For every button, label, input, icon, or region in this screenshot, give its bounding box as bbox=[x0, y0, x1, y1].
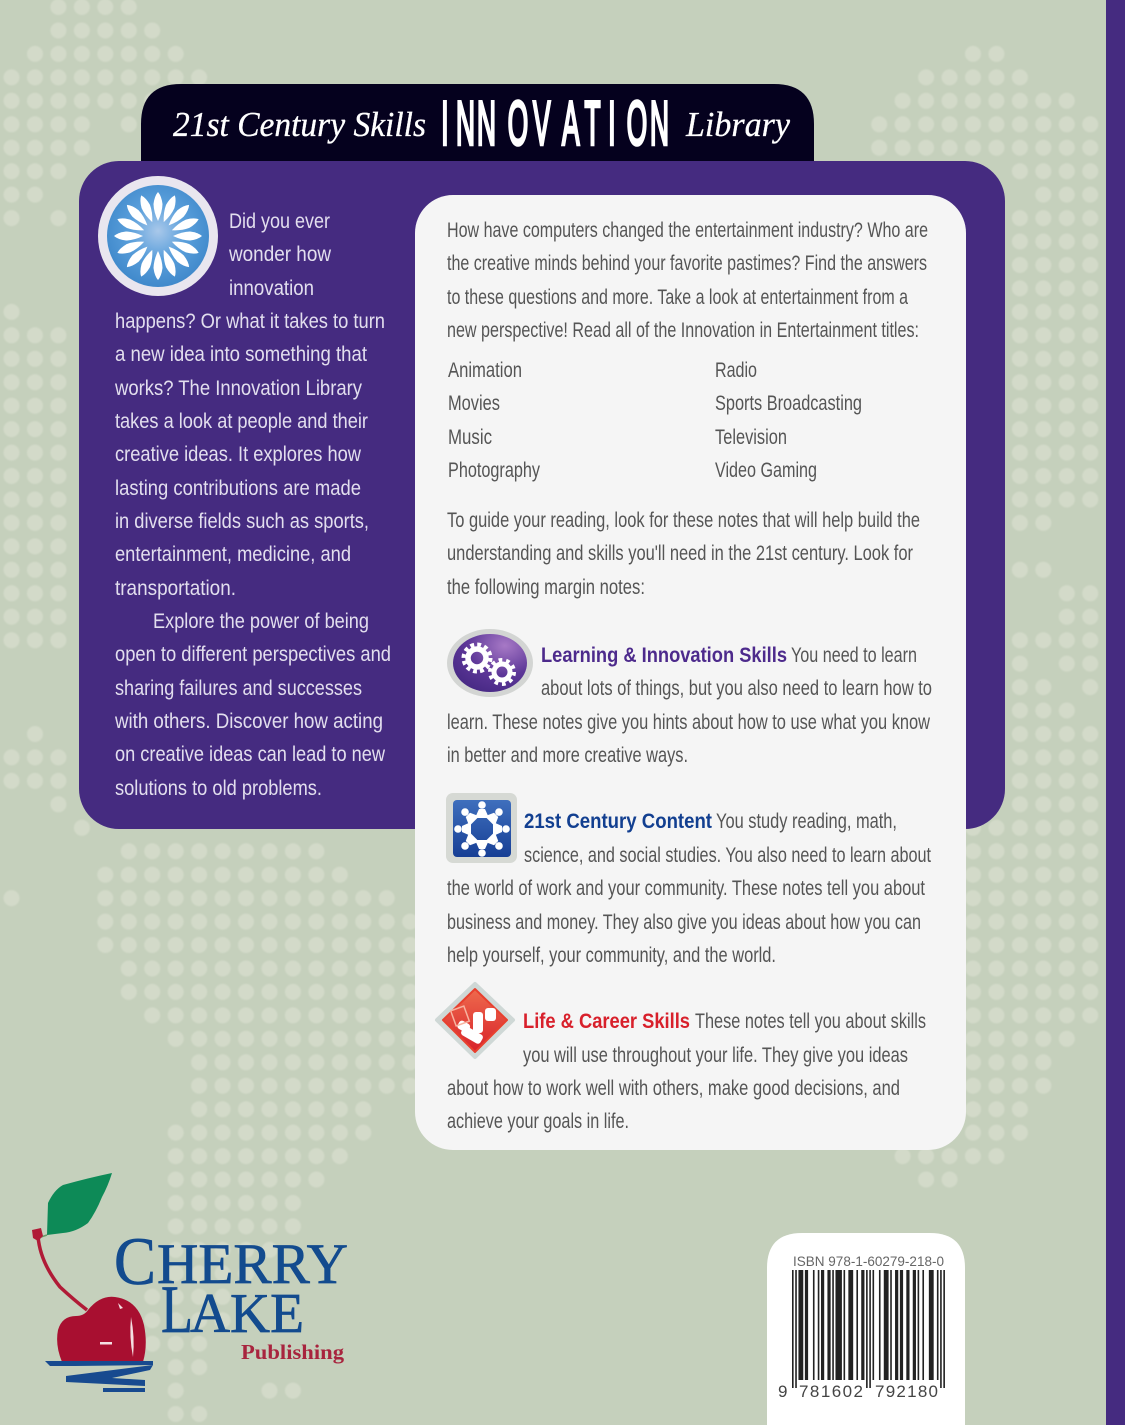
text: learning and innovation skills bbox=[447, 644, 932, 767]
text: learning and innovation skills: learn. These notes give you hints about how to use what you know bbox=[447, 711, 931, 734]
text: introduction paragraphs: wonder how bbox=[228, 243, 332, 266]
text: introduction paragraphs: lasting contributions are made bbox=[115, 477, 361, 500]
text: introduction paragraphs: with others. Discover how acting bbox=[114, 710, 383, 733]
text: 21st century content bbox=[447, 810, 931, 967]
text: 21st century content: 21st Century Content bbox=[524, 810, 712, 833]
logo wordmark bbox=[114, 1223, 348, 1364]
text: introduction paragraphs: solutions to old problems. bbox=[115, 777, 322, 800]
text: introduction paragraphs: works? The Innovation Library bbox=[114, 377, 362, 400]
text: 21st century content: help yourself, your community, and the world. bbox=[447, 944, 776, 967]
title banner: INNOVATION bbox=[441, 90, 669, 159]
text: learning and innovation skills: You need to learn bbox=[791, 644, 917, 667]
list: entertainment titles: Music bbox=[448, 426, 492, 449]
text: introduction paragraphs: sharing failures and successes bbox=[115, 677, 362, 700]
text: reading guide: understanding and skills you'll need in the 21st century. Look for bbox=[447, 542, 913, 565]
text: intro paragraph: new perspective! Read all of the Innovation in Entertainment titles: bbox=[447, 319, 919, 342]
text: introduction paragraphs: a new idea into something that bbox=[115, 343, 367, 366]
text: 21st century content: the world of work and your community. These notes tell you about bbox=[447, 877, 925, 900]
list: entertainment titles: Video Gaming bbox=[715, 459, 817, 482]
text: introduction paragraphs: Explore the power of being bbox=[153, 610, 369, 633]
text: 21st century content: science, and social studies. You also need to learn about bbox=[524, 844, 931, 867]
text: introduction paragraphs: happens? Or what it takes to turn bbox=[115, 310, 385, 333]
icon: cherry with leaf bbox=[32, 1173, 153, 1392]
text: life and career skills: Life & Career Skills bbox=[523, 1010, 690, 1033]
text: reading guide bbox=[447, 509, 920, 599]
text: life and career skills: achieve your goals in life. bbox=[447, 1110, 629, 1133]
text: reading guide: the following margin notes: bbox=[447, 576, 645, 599]
barcode digits: 781602 bbox=[799, 1382, 863, 1401]
logo: Cherry Lake Publishing bbox=[32, 1173, 348, 1392]
list: entertainment titles: Movies bbox=[448, 392, 500, 415]
icon: red diamond with hands bbox=[437, 984, 513, 1057]
text: introduction paragraphs: on creative ideas can lead to new bbox=[115, 743, 386, 766]
icon: circle of people bbox=[446, 793, 517, 863]
text: introduction paragraphs: creative ideas. It explores how bbox=[115, 443, 362, 466]
text: introduction paragraphs: open to different perspectives and bbox=[115, 643, 391, 666]
barcode bars bbox=[792, 1270, 945, 1388]
text: life and career skills: you will use throughout your life. They give you ideas bbox=[523, 1044, 908, 1067]
text: intro paragraph: How have computers changed the entertainment industry? Who are bbox=[447, 219, 928, 242]
text: 21st century content: You study reading, math, bbox=[716, 810, 897, 833]
logo wordmark: HERRY bbox=[157, 1233, 348, 1296]
barcode digits: 9 bbox=[778, 1382, 787, 1401]
logo wordmark: C bbox=[114, 1223, 156, 1299]
list: entertainment titles: Animation bbox=[448, 359, 522, 382]
icon: flower badge bbox=[98, 176, 218, 296]
ISBN label: ISBN 978-1-60279-218-0 bbox=[793, 1254, 944, 1269]
text: intro paragraph bbox=[447, 219, 928, 342]
text: introduction paragraphs: takes a look at people and their bbox=[115, 410, 368, 433]
logo wordmark: L bbox=[161, 1271, 193, 1347]
list: entertainment titles: Radio bbox=[715, 359, 757, 382]
text: life and career skills bbox=[447, 1010, 926, 1133]
text: life and career skills: These notes tell you about skills bbox=[695, 1010, 926, 1033]
logo wordmark: Publishing bbox=[241, 1340, 345, 1364]
right edge purple strip bbox=[1106, 0, 1125, 1425]
text: intro paragraph: the creative minds behind your favorite pastimes? Find the answers bbox=[447, 252, 927, 275]
text: introduction paragraphs: innovation bbox=[229, 277, 314, 300]
title banner: 21st Century Skills bbox=[173, 105, 426, 144]
text: learning and innovation skills: Learning & Innovation Skills bbox=[541, 644, 787, 667]
panel: purple introduction bbox=[79, 161, 1005, 829]
list: entertainment titles bbox=[448, 359, 862, 482]
text: life and career skills: about how to work well with others, make good decisions, and bbox=[447, 1077, 900, 1100]
list: entertainment titles: Sports Broadcasting bbox=[715, 392, 862, 415]
text: 21st century content: business and money. They also give you ideas about how you can bbox=[447, 911, 921, 934]
text: introduction paragraphs bbox=[114, 210, 391, 800]
text: learning and innovation skills: about lots of things, but you also need to learn how to bbox=[541, 677, 932, 700]
text: introduction paragraphs: in diverse fields such as sports, bbox=[115, 510, 369, 533]
text: learning and innovation skills: in better and more creative ways. bbox=[447, 744, 688, 767]
text: introduction paragraphs: transportation. bbox=[115, 577, 236, 600]
logo wordmark: AKE bbox=[190, 1283, 304, 1345]
text: introduction paragraphs: entertainment, medicine, and bbox=[115, 543, 351, 566]
barcode digits bbox=[778, 1382, 938, 1401]
list: entertainment titles: Photography bbox=[448, 459, 540, 482]
barcode digits: 792180 bbox=[875, 1382, 938, 1401]
list: entertainment titles: Television bbox=[715, 426, 787, 449]
barcode panel bbox=[767, 1233, 965, 1425]
text: reading guide: To guide your reading, look for these notes that will help build the bbox=[447, 509, 920, 532]
icon: gears bbox=[447, 629, 533, 697]
title banner bbox=[141, 84, 814, 162]
text: introduction paragraphs: Did you ever bbox=[229, 210, 330, 233]
panel: white description bbox=[415, 195, 966, 1150]
text: intro paragraph: to these questions and more. Take a look at entertainment from a bbox=[447, 286, 908, 309]
title banner: Library bbox=[685, 105, 790, 144]
